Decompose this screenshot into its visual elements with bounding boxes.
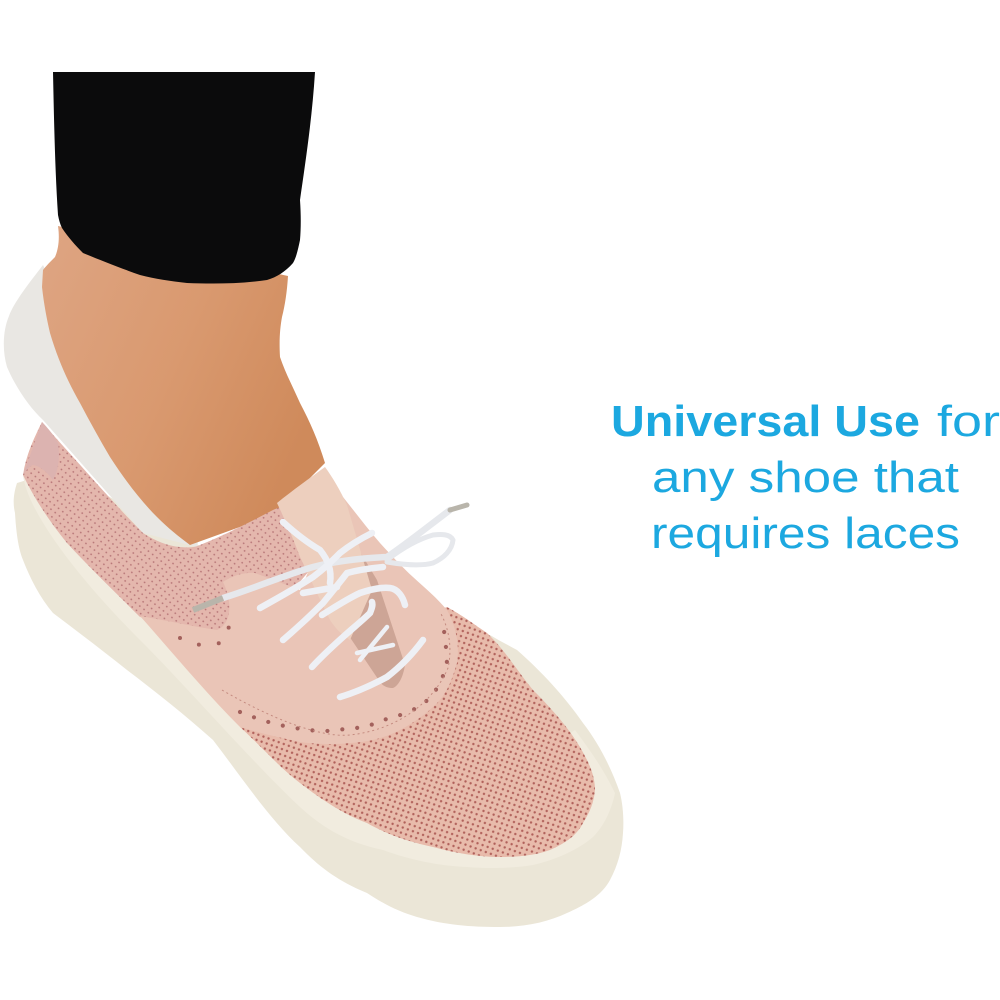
lace aglet left — [193, 598, 223, 610]
white shoe sole — [14, 470, 623, 927]
caption — [611, 397, 1000, 558]
white elastic laces — [223, 510, 453, 697]
eyelet lace one — [322, 588, 405, 615]
brogue stitching — [222, 612, 450, 735]
lace opening — [345, 535, 405, 688]
bottom lace — [340, 640, 423, 697]
short lace stub — [303, 587, 337, 593]
heel knit upper — [23, 422, 310, 640]
heel brogue holes — [180, 613, 235, 645]
brogue perforation row — [240, 625, 447, 731]
lower crossing laces — [357, 627, 393, 660]
black leggings — [53, 72, 315, 284]
shoe tongue — [277, 467, 372, 640]
crossing lace one — [260, 533, 372, 608]
photo: foot wearing pink shoe with elastic laces — [4, 72, 623, 927]
ankle and foot skin — [42, 226, 325, 545]
toe knit upper — [240, 607, 595, 857]
smooth sole lip — [23, 475, 615, 868]
caption line 2: any shoe that — [652, 453, 959, 502]
caption line 1 bold: Universal Use — [611, 397, 920, 446]
suede eyelet panel — [140, 497, 458, 744]
lace bow loop — [387, 535, 453, 565]
crossing lace two — [283, 567, 383, 640]
lace with grey tips — [223, 510, 450, 598]
heel counter patch — [23, 422, 59, 480]
caption line 1 regular: for — [937, 397, 1000, 446]
caption line 3: requires laces — [651, 509, 960, 558]
lace aglet right — [450, 505, 467, 510]
white no-show sock — [4, 265, 200, 547]
crossing lace three — [283, 522, 331, 583]
eyelet lace two — [312, 602, 372, 667]
